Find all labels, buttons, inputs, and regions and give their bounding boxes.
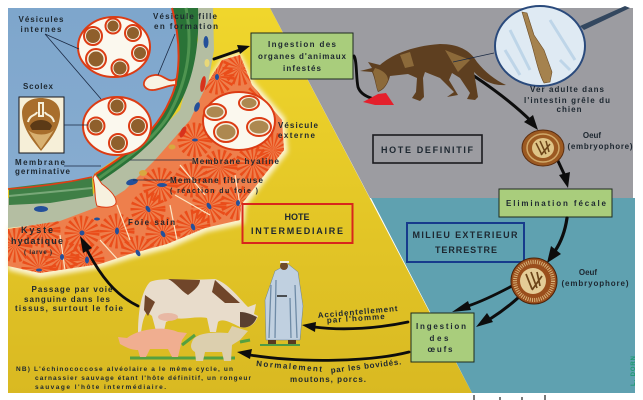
label: Normalement par les bovidés, moutons, porcs: moutons, porcs. <box>290 375 366 384</box>
illustration: magnifying glass with adult worm <box>495 6 630 86</box>
illustration: raw meat <box>363 93 394 105</box>
label: Kyste hydatique: Kyste <box>21 225 53 235</box>
box: Ingestion des œufs <box>411 313 474 362</box>
box: Ingestion des organes d'animaux infestés: organes d'animaux <box>258 52 347 61</box>
illustration: man <box>260 261 303 345</box>
box: HOTE INTERMEDIAIRE <box>242 204 352 243</box>
box: HOTE INTERMEDIAIRE: INTERMEDIAIRE <box>251 226 343 236</box>
label: Vésicule fille en formation <box>153 12 218 31</box>
arrow: egg to ingestion lower <box>476 297 519 327</box>
arrow: ingestion to man <box>302 322 408 332</box>
box: MILIEU EXTERIEUR TERRESTRE: MILIEU EXTERIEUR <box>412 230 518 240</box>
box: Ingestion des organes d'animaux infestés <box>251 33 353 79</box>
arrow: organs to raw meat <box>354 56 371 98</box>
note: NB alveolar echinococcosis: carnassier sauvage étant l'hôte définitif, un rongeur <box>35 375 251 382</box>
arrow: egg to ingestion upper <box>452 286 512 312</box>
host cells in the fibrous band <box>34 36 210 212</box>
label: Vésicules internes: internes <box>20 25 62 34</box>
label: Oeuf (embryophore) lower: (embryophore) <box>562 279 629 288</box>
liver halo <box>8 52 288 278</box>
label: Ver adulte dans l'intestin grêle du chien: l'intestin grêle du <box>524 96 610 105</box>
illustration: egg 2 <box>511 258 557 304</box>
label: Accidentellement par l'homme: Accidentellement <box>317 304 398 320</box>
label: Passage par voie sanguine: tissus, surtout le foie <box>15 304 124 313</box>
label: Normalement par les bovidés, moutons, porcs: par les bovidés. <box>330 357 402 375</box>
arrow: dog to egg <box>474 76 538 130</box>
cyst wall: germinative and hyaline membranes <box>8 8 198 205</box>
arrow: egg to faecal elimination <box>558 161 570 188</box>
label: Membrane germinative: germinative <box>15 167 71 176</box>
panel: definitive host grey background <box>270 8 633 198</box>
box: HOTE DEFINITIF: HOTE DEFINITIF <box>381 145 474 155</box>
label: Passage par voie sanguine <box>15 285 124 313</box>
label: Vésicules internes: Vésicules <box>18 15 64 24</box>
scolex inset <box>19 97 64 153</box>
box: Elimination fécale <box>499 189 612 217</box>
label: Membrane fibreuse <box>170 176 264 195</box>
illustration: cow <box>138 279 258 333</box>
label: Oeuf (embryophore) upper: (embryophore) <box>568 142 633 151</box>
label: Vésicule externe: Vésicule <box>278 121 319 130</box>
panel: external environment teal background <box>371 198 635 393</box>
label: Membrane fibreuse: Membrane fibreuse <box>170 176 264 185</box>
label: Vésicule fille en formation: Vésicule fille <box>153 12 218 21</box>
note: NB alveolar echinococcosis <box>16 366 251 391</box>
illustration: sheep <box>191 326 248 361</box>
label: Ver adulte dans l'intestin grêle du chien <box>524 85 610 114</box>
liver tissue <box>8 55 284 273</box>
panel: host intermediate yellow background <box>8 8 472 393</box>
box: HOTE INTERMEDIAIRE: HOTE <box>284 212 310 222</box>
note: NB alveolar echinococcosis: NB) L'échinococcose alvéolaire a le même cycle, un <box>16 366 233 373</box>
label: Kyste hydatique <box>11 225 63 256</box>
box: MILIEU EXTERIEUR TERRESTRE <box>407 223 524 262</box>
label: Kyste hydatique: hydatique <box>11 236 63 246</box>
internal vesicle 2 <box>83 97 151 155</box>
label: Oeuf (embryophore) upper <box>568 131 633 151</box>
label: Ver adulte dans l'intestin grêle du chien: chien <box>556 105 582 114</box>
internal vesicle 1 <box>78 17 150 77</box>
daughter vesicle forming <box>144 75 176 90</box>
note: NB alveolar echinococcosis: sauvage l'hôte intermédiaire. <box>35 384 166 391</box>
arrow: wall to ingestion of organs <box>214 45 250 59</box>
arrow: ingestion to animals <box>237 349 409 360</box>
box: Ingestion des œufs: œufs <box>428 345 453 354</box>
label: Accidentellement par l'homme: par l'homme <box>327 312 386 325</box>
panel: cyst interior blue <box>8 8 179 188</box>
label: Passage par voie sanguine: Passage par voie <box>32 285 113 294</box>
label: Passage par voie sanguine: sanguine dans les <box>24 295 111 304</box>
label: Oeuf (embryophore) lower <box>562 268 629 288</box>
signature: L. DORN <box>631 356 637 386</box>
box: MILIEU EXTERIEUR TERRESTRE: TERRESTRE <box>435 245 497 255</box>
label: Kyste hydatique: ( larve ) <box>24 250 52 256</box>
label: Ver adulte dans l'intestin grêle du chien: Ver adulte dans <box>530 85 605 94</box>
liver cell nuclei <box>36 74 240 272</box>
leader: dog to lens <box>453 53 494 62</box>
box: Ingestion des organes d'animaux infestés: infestés <box>283 64 322 73</box>
box: Ingestion des œufs: des <box>430 334 449 343</box>
label: Scolex: Scolex <box>23 82 54 91</box>
box: HOTE DEFINITIF <box>373 135 482 163</box>
box: Ingestion des organes d'animaux infestés: Ingestion des <box>268 40 337 49</box>
label: Foie sain: Foie sain <box>128 218 175 227</box>
arrow: cow to liver <box>80 236 138 306</box>
external vesicle <box>203 92 275 150</box>
label: Vésicule externe <box>278 121 319 140</box>
label: Normalement par les bovidés, moutons, porcs <box>256 357 402 384</box>
bud at the base of the wall <box>93 174 116 207</box>
illustration: dog <box>360 44 506 101</box>
leader lines <box>45 34 192 180</box>
label: Vésicule fille en formation: en formation <box>154 22 218 31</box>
label: Membrane hyaline: Membrane hyaline <box>192 157 280 166</box>
label: Membrane germinative: Membrane <box>15 158 66 167</box>
illustration: grass <box>130 335 250 358</box>
illustration: pig <box>118 329 187 357</box>
label: Normalement par les bovidés, moutons, porcs: Normalement <box>256 359 323 374</box>
label: Vésicules internes <box>18 15 64 34</box>
illustration: egg 1 <box>522 130 564 166</box>
arrow: faecal elimination to egg <box>547 218 567 263</box>
label: Membrane fibreuse: ( réaction du foie ) <box>170 188 258 195</box>
label: Oeuf (embryophore) upper: Oeuf <box>583 131 601 140</box>
box: Ingestion des œufs: Ingestion <box>416 322 466 331</box>
host tissue band beside the wall <box>8 8 214 228</box>
label: Oeuf (embryophore) lower: Oeuf <box>579 268 597 277</box>
label: Vésicule externe: externe <box>278 131 316 140</box>
label: Membrane germinative <box>15 158 71 176</box>
box: Elimination fécale: Elimination fécale <box>506 199 607 208</box>
